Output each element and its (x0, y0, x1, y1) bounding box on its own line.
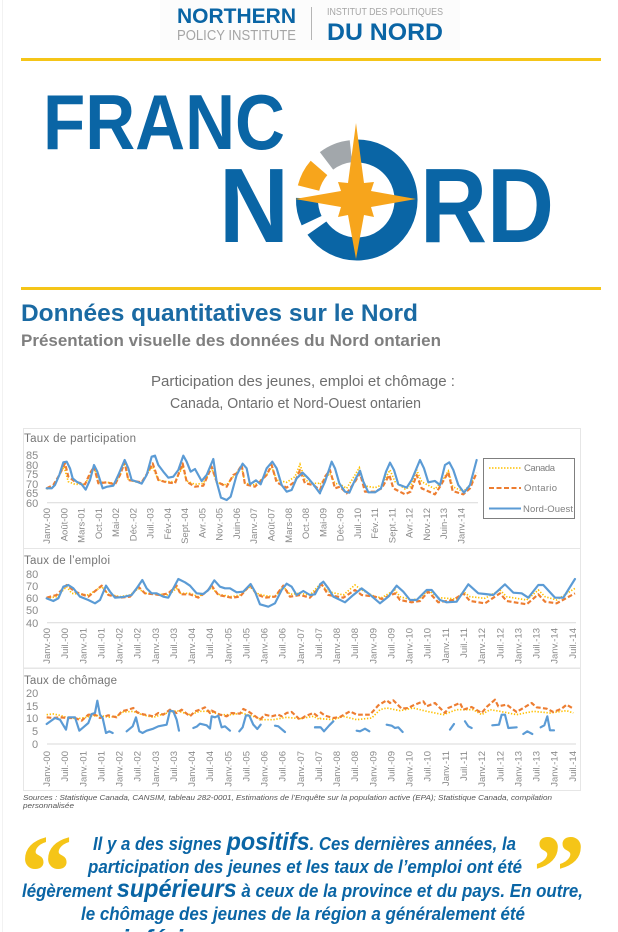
panel: taux de participation: Juin-13 (439, 508, 450, 539)
panel: taux de chômage: Juil.-00 (60, 751, 71, 782)
panel: taux de participation: Sept.-11 (387, 508, 398, 543)
panel: taux de participation: Janv.-07 (249, 508, 260, 544)
panel: taux de chômage: Juil.-07 (314, 751, 325, 782)
legend: Ontario (524, 483, 557, 494)
panel: taux de participation: Avr.-12 (405, 508, 416, 538)
panel: taux de chômage: 0 (32, 739, 38, 751)
heading: Données quantitatives sur le Nord (21, 300, 418, 327)
main logo: Franc Nord (43, 78, 554, 265)
quote text: légèrement supérieurs à ceux de la province et du pays. En outre, (22, 875, 583, 903)
header logo: Northern Policy Institute: DU NORD (327, 19, 443, 46)
panel: taux de l'emploi: Juil.-02 (133, 628, 144, 659)
panel: taux de chômage: Juil.-09 (386, 751, 398, 782)
panel: taux de chômage: Juil.-02 (133, 751, 144, 782)
panel: taux de l'emploi: Janv.-09 (368, 628, 379, 664)
panel: taux de l'emploi: 70 (26, 581, 38, 593)
panel: taux de chômage: Juil.-04 (205, 751, 216, 782)
panel: taux de participation: Août-00 (59, 508, 70, 541)
panel: taux de chômage: Janv.-13 (513, 751, 524, 787)
panel: taux de l'emploi: Juil.-07 (314, 628, 325, 659)
panel: taux de chômage: Janv.-00 (42, 751, 53, 787)
panel: taux de participation: Janv.-00 (42, 508, 53, 544)
main logo: Franc Nord: RD (420, 147, 554, 265)
panel: taux de l'emploi: 60 (26, 593, 38, 605)
panel: taux de chômage: Juil.-12 (495, 751, 506, 782)
panel: taux de l'emploi: Janv.-05 (223, 628, 234, 664)
panel: taux de l'emploi: Juil.-03 (169, 628, 180, 659)
chart title: Participation des jeunes, emploi et chômage : (151, 374, 455, 390)
quote text: le chômage des jeunes de la région a généralement été (81, 904, 525, 924)
icon: compass ring and star (295, 123, 416, 259)
panel: taux de chômage: Janv.-14 (550, 751, 561, 787)
quote text: participation des jeunes et les taux de l’emploi ont été (87, 857, 522, 877)
panel: taux de participation: 60 (26, 498, 38, 510)
line series: Canada, Ontario, Nord-Ouest (47, 700, 573, 734)
source note: personnalisée (22, 801, 74, 810)
panel: taux de chômage: Janv.-09 (368, 751, 379, 787)
panel: taux de l'emploi: Janv.-10 (405, 628, 416, 664)
panel: taux de chômage: 5 (32, 726, 38, 738)
panel: taux de l'emploi: Janv.-14 (550, 628, 561, 664)
panel: taux de chômage: Taux de chômage (24, 675, 117, 687)
panel: taux de participation: Nov.-05 (215, 508, 226, 541)
panel: taux de chômage: 10 (26, 713, 38, 725)
panel: taux de l'emploi: Juil.-12 (495, 628, 506, 659)
panel: taux de participation: Fév.-04 (163, 508, 174, 540)
panel: taux de chômage: 15 (26, 701, 38, 713)
panel: taux de participation: Taux de participation (24, 433, 136, 445)
panel: taux de participation: Déc.-09 (336, 508, 347, 541)
panel: taux de chômage: Janv.-06 (260, 751, 271, 787)
panel: taux de l'emploi: Janv.-01 (78, 628, 89, 664)
header logo: Northern Policy Institute: POLICY INSTITUTE (177, 27, 296, 44)
legend: Canada (524, 463, 556, 474)
panel: taux de participation: Août-07 (266, 508, 278, 541)
panel: taux de l'emploi: Janv.-00 (42, 628, 53, 664)
panel: taux de chômage: Juil.-14 (568, 751, 579, 782)
panel: taux de l'emploi: Juil.-11 (459, 628, 470, 658)
panel: taux de l'emploi: Juil.-05 (241, 628, 252, 659)
panel: taux de l'emploi: Janv.-04 (187, 628, 198, 664)
panel: taux de participation (24, 428, 580, 548)
source note (22, 793, 552, 810)
header logo: Northern Policy Institute: NORTHERN (177, 5, 296, 28)
panel: taux de l'emploi: Janv.-06 (260, 628, 271, 664)
panel: taux de l'emploi: Janv.-08 (332, 628, 343, 664)
panel: taux de participation: Mai-02 (111, 508, 122, 537)
quote text: Il y a des signes positifs. Ces dernières années, la (93, 828, 516, 856)
panel: taux de participation: 80 (26, 460, 38, 472)
panel: taux de chômage: Juil.-11 (459, 751, 470, 781)
subheading: Présentation visuelle des données du Nord ontarien (21, 332, 441, 350)
panel: taux de l'emploi: Juil.-13 (532, 628, 542, 659)
panel: taux de l'emploi: Taux de l’emploi (24, 555, 110, 567)
panel: taux de l'emploi: Juil.-09 (386, 628, 398, 659)
line series: Canada, Ontario, Nord-Ouest (47, 579, 575, 607)
panel: taux de l'emploi: 40 (26, 618, 38, 630)
panel: taux de l'emploi: Janv.-02 (114, 628, 126, 664)
panel: taux de participation: Avr.-05 (197, 508, 208, 538)
panel: taux de chômage: Janv.-07 (296, 751, 307, 787)
panel: taux de l'emploi: Janv.-12 (477, 628, 488, 664)
icon: opening quotation mark: “ (20, 813, 72, 930)
panel: taux de chômage: Juil.-03 (169, 751, 180, 782)
panel: taux de participation: 65 (26, 488, 38, 500)
panel: taux de participation: Nov.-12 (422, 508, 433, 541)
panel: taux de participation: Juin-06 (232, 508, 243, 539)
chart title (151, 374, 455, 412)
panel: taux de chômage: Juil.-13 (532, 751, 542, 782)
legend: Nord-Ouest (523, 504, 573, 515)
panel: taux de participation: 85 (26, 450, 38, 462)
panel: taux de chômage: Janv.-01 (78, 751, 89, 787)
panel: taux de l'emploi (24, 548, 580, 668)
panel: taux de participation: Oct.-01 (94, 508, 105, 539)
panel: taux de participation: Mai-09 (318, 508, 329, 537)
panel: taux de participation: Mars-08 (284, 508, 295, 543)
panel: taux de participation: 75 (26, 469, 38, 481)
panel: taux de chômage: Janv.-05 (223, 751, 234, 787)
panel: taux de l'emploi: 50 (26, 605, 38, 617)
panel: taux de l'emploi: Janv.-07 (296, 628, 307, 664)
panel: taux de participation: Mars-01 (76, 508, 88, 543)
panel: taux de chômage: Janv.-02 (114, 751, 126, 787)
panel: taux de participation: Juil.-03 (146, 508, 157, 539)
panel: taux de chômage: Juil.-01 (96, 751, 107, 782)
panel: taux de participation: Déc.-02 (128, 508, 139, 541)
panel: taux de chômage: Juil.-05 (241, 751, 252, 782)
panel: taux de participation: Juil.-10 (353, 508, 364, 539)
panel: taux de chômage: Juil.-08 (350, 751, 361, 782)
panel: taux de participation: 70 (26, 479, 38, 491)
panel: taux de l'emploi: 80 (26, 569, 38, 581)
source note: Sources : Statistique Canada, CANSIM, tableau 282-0001, Estimations de l’Enquête sur la population active (EPA); Statistique Canada, compilation (23, 793, 552, 802)
header logo: Northern Policy Institute: INSTITUT DES POLITIQUES (327, 6, 443, 18)
panel: taux de participation: Janv.-14 (456, 508, 468, 544)
panel: taux de l'emploi: Janv.-13 (513, 628, 524, 664)
main logo: Franc Nord: FRANC (43, 78, 285, 166)
panel: taux de chômage: Janv.-11 (441, 751, 452, 786)
panel: taux de participation: Oct.-08 (301, 508, 312, 539)
legend (484, 458, 574, 518)
panel: taux de l'emploi: Janv.-03 (151, 628, 162, 664)
panel: taux de chômage: Janv.-10 (405, 751, 416, 787)
panel: taux de l'emploi: Janv.-11 (441, 628, 452, 663)
header logo: Northern Policy Institute (160, 0, 460, 50)
panel: taux de chômage: Juil.-10 (423, 751, 434, 782)
panel: taux de participation: Fév.-11 (370, 508, 381, 539)
panel: taux de l'emploi: Juil.-08 (350, 628, 361, 659)
panel: taux de l'emploi: Juil.-04 (205, 628, 216, 659)
panel: taux de chômage: Juil.-06 (278, 751, 289, 782)
main logo: Franc Nord: N (219, 147, 289, 265)
panel: taux de chômage: Janv.-03 (151, 751, 162, 787)
line series: Canada, Ontario, Nord-Ouest (47, 456, 477, 500)
panel: taux de participation: Sept.-04 (180, 508, 191, 544)
panel: taux de l'emploi: Juil.-00 (60, 628, 71, 659)
panel: taux de l'emploi: Juil.-06 (278, 628, 289, 659)
panel: taux de chômage: Janv.-12 (477, 751, 488, 787)
panel: taux de l'emploi: Juil.-01 (96, 628, 107, 659)
quote text (22, 828, 583, 932)
panel: taux de l'emploi: Juil.-10 (423, 628, 434, 659)
panel: taux de chômage (24, 668, 580, 790)
panel: taux de l'emploi: Juil.-14 (568, 628, 579, 659)
panel: taux de chômage: 20 (26, 688, 38, 700)
panel: taux de chômage: Janv.-04 (187, 751, 198, 787)
icon: closing quotation mark: ” (533, 813, 586, 930)
chart title: Canada, Ontario et Nord-Ouest ontarien (170, 396, 421, 412)
panel: taux de chômage: Janv.-08 (332, 751, 343, 787)
